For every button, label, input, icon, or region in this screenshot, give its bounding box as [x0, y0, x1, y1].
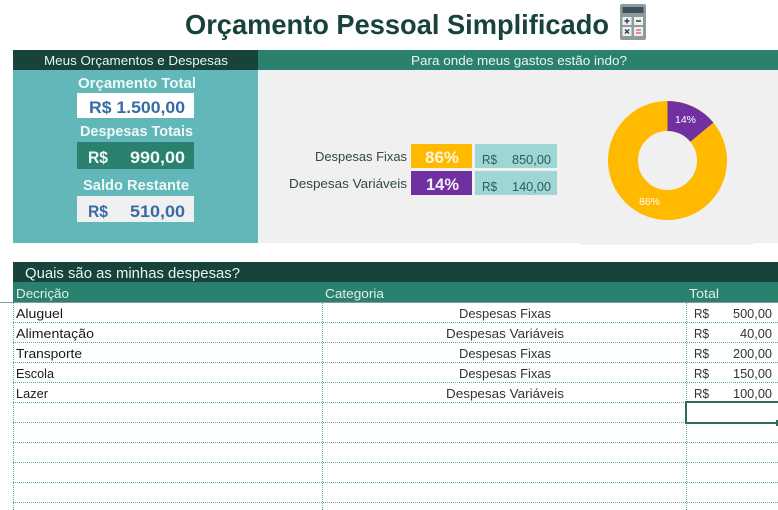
row: Escola: Escola: [16, 366, 55, 381]
heading: where spending goes: Para onde meus gastos estão indo?: [411, 53, 627, 68]
row: Lazer: 100,00: [733, 386, 772, 401]
row: variable expenses: 14%: [426, 175, 459, 194]
row: Aluguel: Aluguel: [16, 306, 63, 321]
value: remaining balance: 510,00: [130, 202, 185, 221]
row: Alimentação: 40,00: [740, 326, 772, 341]
table header: Categoria: [325, 286, 385, 301]
row: Lazer: [16, 386, 772, 401]
row: Lazer: Lazer: [16, 386, 49, 401]
row: Aluguel: 500,00: [733, 306, 772, 321]
row: variable expenses: [289, 171, 557, 195]
row: Alimentação: R$: [694, 326, 710, 341]
heading: where spending goes: [258, 50, 778, 70]
row: variable expenses: 140,00: [512, 179, 551, 194]
title: Orçamento Pessoal Simplificado: [185, 9, 609, 40]
row: Lazer: Despesas Variáveis: [446, 386, 565, 401]
row: Alimentação: Alimentação: [16, 326, 94, 341]
panel: budget summary: [13, 50, 258, 243]
row: Transporte: Despesas Fixas: [459, 346, 551, 361]
donut chart: 86%: [639, 196, 660, 208]
label: total budget: Orçamento Total: [78, 75, 196, 92]
row: fixed expenses: R$: [482, 152, 498, 167]
selected cell: [686, 402, 778, 426]
row: Escola: R$: [694, 366, 710, 381]
row: Lazer: R$: [694, 386, 710, 401]
panel: where spending goes: [258, 50, 778, 245]
value: remaining balance: R$: [88, 202, 108, 221]
value: remaining balance: [77, 196, 194, 222]
table header: Total: [689, 286, 719, 301]
row: variable expenses: R$: [482, 179, 498, 194]
label: remaining balance: Saldo Restante: [83, 177, 189, 194]
row: Transporte: R$: [694, 346, 710, 361]
row: Transporte: 200,00: [733, 346, 772, 361]
row: Aluguel: [16, 306, 772, 321]
row: Transporte: Transporte: [16, 346, 82, 361]
heading: budgets and expenses: Meus Orçamentos e Despesas: [44, 53, 229, 68]
value: total budget: [77, 93, 194, 118]
row: Alimentação: [16, 326, 772, 341]
icon: calculator: [620, 4, 646, 40]
panel background: teal: [13, 70, 258, 243]
table header: [0, 282, 778, 302]
value: total expenses: R$: [88, 148, 108, 167]
heading: what are my expenses: [13, 262, 778, 282]
row: Transporte: [16, 346, 772, 361]
row: Aluguel: Despesas Fixas: [459, 306, 551, 321]
label: total expenses: Despesas Totais: [80, 123, 193, 140]
row: Alimentação: Despesas Variáveis: [446, 326, 565, 341]
row: Escola: 150,00: [733, 366, 772, 381]
value: total budget: R$ 1.500,00: [89, 98, 185, 117]
row: fixed expenses: [315, 144, 557, 168]
table header: Decrição: [16, 286, 69, 301]
row: Aluguel: R$: [694, 306, 710, 321]
value: total expenses: 990,00: [130, 148, 185, 167]
donut chart: [623, 101, 713, 208]
row: Escola: Despesas Fixas: [459, 366, 551, 381]
row: fixed expenses: Despesas Fixas: [315, 149, 407, 164]
heading: budgets and expenses: [13, 50, 258, 70]
row: variable expenses: Despesas Variáveis: [289, 176, 408, 191]
panel: expense table: [0, 262, 778, 510]
row: fixed expenses: 850,00: [512, 152, 551, 167]
panel background: grey: [258, 70, 778, 245]
donut chart: 14%: [675, 114, 696, 126]
row: Escola: [16, 366, 772, 381]
row: fixed expenses: 86%: [425, 148, 459, 167]
heading: what are my expenses: Quais são as minhas despesas?: [25, 265, 240, 282]
value: total expenses: [77, 142, 194, 169]
